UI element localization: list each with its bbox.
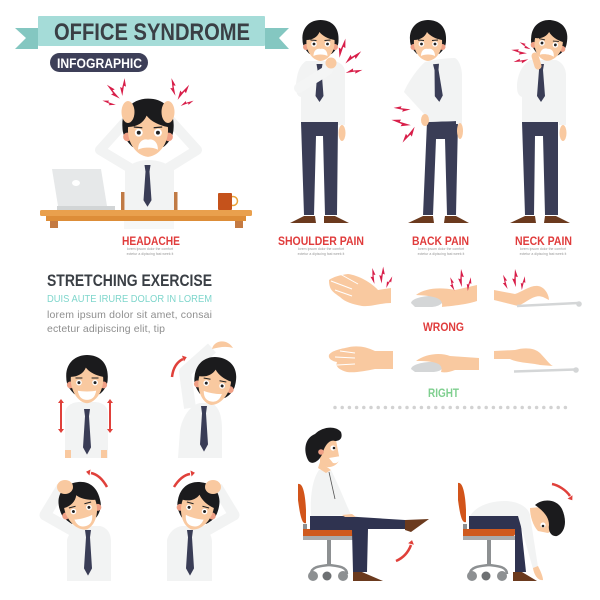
stretching exercise heading [47, 272, 212, 335]
wrong hand postures [329, 274, 582, 307]
stretching exercise heading: STRETCHING EXERCISE [47, 272, 212, 290]
neck pain label: NECK PAIN [515, 234, 572, 248]
laptop [52, 169, 115, 210]
neck pain label: ectetur a dipiscing fast week it [520, 252, 566, 256]
shoulder bolts [336, 38, 363, 75]
back pain figure [404, 20, 469, 223]
back pain label: lorem ipsum dolor the comfort [418, 247, 464, 251]
neck bolts [511, 41, 532, 64]
headache label: HEADACHE [122, 234, 180, 248]
exercise: neck stretch right [167, 470, 234, 581]
stretching exercise heading: DUIS AUTE IRURE DOLOR IN LOREM [47, 293, 212, 305]
wrong label: WRONG [423, 322, 464, 334]
shoulder pain figure [290, 20, 349, 223]
right hand postures [329, 346, 579, 373]
exercise: shoulder raise [58, 355, 113, 458]
shoulder pain label: ectetur a dipiscing fast week it [298, 252, 344, 256]
neck pain figure [510, 18, 570, 223]
seated leg raise figure [298, 428, 429, 581]
coffee mug [218, 193, 238, 210]
shoulder pain label: SHOULDER PAIN [278, 234, 364, 248]
back pain label: BACK PAIN [412, 234, 469, 248]
exercise: side bend [172, 341, 239, 458]
back bolts [391, 105, 418, 145]
wrong hand bolts [370, 266, 527, 291]
shoulder pain label [278, 234, 364, 256]
shoulder pain label: lorem ipsum dolor the comfort [298, 247, 344, 251]
right label: RIGHT [428, 388, 459, 400]
seated forward bend figure [458, 483, 575, 581]
back pain label [412, 234, 469, 256]
title banner: OFFICE SYNDROME [54, 19, 250, 46]
neck pain label: lorem ipsum dolor the comfort [520, 247, 566, 251]
dotted divider [335, 406, 566, 409]
stretching exercise heading: lorem ipsum dolor sit amet, consai [47, 309, 212, 321]
desk [40, 210, 252, 228]
neck pain label [515, 234, 572, 256]
headache label: ectetur a dipiscing fast week it [127, 252, 173, 256]
headache label [122, 234, 180, 256]
headache figure at desk [100, 99, 197, 229]
headache bolts [102, 78, 194, 107]
back pain label: ectetur a dipiscing fast week it [418, 252, 464, 256]
infographic pill: INFOGRAPHIC [57, 56, 142, 71]
title banner [15, 16, 289, 49]
stretching exercise heading: ectetur adipiscing elit, tip [47, 323, 165, 335]
exercise: neck stretch left [45, 469, 111, 581]
headache label: lorem ipsum dolor the comfort [127, 247, 173, 251]
